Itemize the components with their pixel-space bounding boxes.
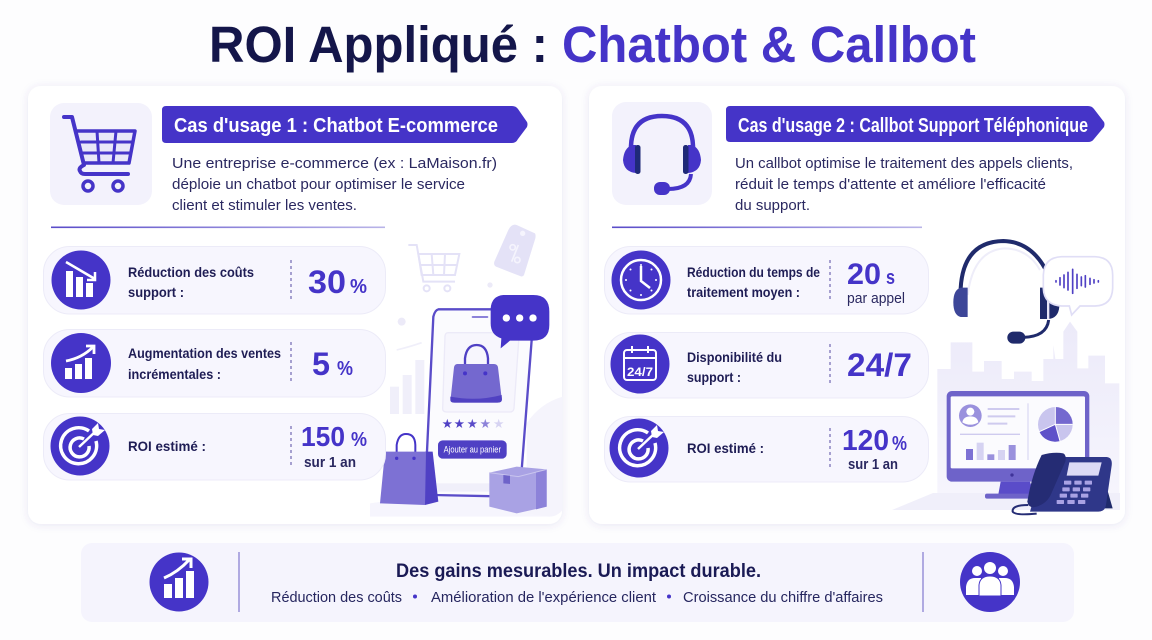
- illustration: e-commerce phone: [370, 225, 563, 517]
- panel: cas d'usage 1: [28, 86, 563, 524]
- stat: ventes incrémentales: incrémentales :: [128, 366, 221, 382]
- stat: réduction des coûts: Réduction des coûts: [128, 264, 254, 280]
- footer benefits: Amélioration de l'expérience client: [431, 590, 656, 606]
- description 1: [172, 155, 497, 214]
- stat: ventes incrémentales: %: [337, 358, 353, 380]
- description 2: réduit le temps d'attente et améliore l'efficacité: [735, 176, 1046, 193]
- description 2: [735, 155, 1073, 214]
- stat: ROI estimé 120: sur 1 an: [848, 456, 898, 473]
- title: [209, 16, 976, 73]
- icon: calendar 24/7: 24/7: [627, 365, 653, 379]
- stat: ROI estimé 150: ROI estimé :: [128, 438, 206, 454]
- footer heading: Des gains mesurables. Un impact durable.: [396, 561, 761, 582]
- icon: people: [960, 552, 1020, 612]
- icon: target: [610, 418, 668, 478]
- stat: temps de traitement: [604, 246, 928, 314]
- panel: footer banner: [81, 543, 1074, 622]
- icon: growth chart: [51, 333, 111, 393]
- stat: ROI estimé 120: %: [892, 433, 907, 455]
- title: Chatbot & Callbot: [562, 16, 976, 73]
- illustration: e-commerce phone: ★: [467, 416, 478, 431]
- stat: réduction des coûts: 30: [308, 264, 346, 300]
- stat: réduction des coûts: support :: [128, 284, 184, 300]
- illustration: e-commerce phone: ★: [493, 416, 504, 431]
- stat: temps de traitement: traitement moyen :: [687, 284, 800, 300]
- illustration: e-commerce phone: Ajouter au panier: [444, 445, 501, 455]
- icon: falling bars: [52, 250, 110, 310]
- stat: ROI estimé 150: %: [351, 429, 367, 451]
- stat: ROI estimé 150: sur 1 an: [304, 454, 356, 471]
- stat: disponibilité: support :: [687, 369, 741, 385]
- stat: temps de traitement: s: [886, 267, 895, 289]
- panel: cas d'usage 2: [589, 86, 1125, 524]
- header ribbon 1: Cas d'usage 1 : Chatbot E-commerce: [174, 115, 498, 137]
- stat: ventes incrémentales: [44, 330, 386, 397]
- stat: réduction des coûts: [44, 246, 386, 314]
- header ribbon 1: [162, 106, 528, 143]
- description 1: Une entreprise e-commerce (ex : LaMaison.fr): [172, 155, 497, 172]
- description 2: Un callbot optimise le traitement des appels clients,: [735, 155, 1073, 172]
- footer benefits: Croissance du chiffre d'affaires: [683, 590, 883, 606]
- stat: temps de traitement: par appel: [847, 290, 905, 307]
- stat: ROI estimé 150: 150: [301, 421, 345, 452]
- footer benefits: Réduction des coûts: [271, 590, 402, 606]
- stat: ventes incrémentales: Augmentation des ventes: [128, 345, 281, 361]
- stat: ROI estimé 150: [44, 414, 386, 480]
- stat: temps de traitement: Réduction du temps de: [687, 264, 820, 280]
- icon: growth: [150, 552, 208, 612]
- title: ROI Appliqué :: [209, 16, 548, 73]
- footer benefits: [271, 590, 883, 606]
- icon: target: [50, 416, 110, 476]
- illustration: e-commerce phone: ★: [442, 416, 453, 431]
- illustration: e-commerce phone: ★: [454, 416, 465, 431]
- description 2: du support.: [735, 197, 810, 214]
- icon: shopping cart: [50, 103, 152, 205]
- stat: ROI estimé 120: ROI estimé :: [687, 440, 764, 456]
- description 1: déploie un chatbot pour optimiser le service: [172, 176, 465, 193]
- icon: clock: [612, 250, 670, 310]
- description 1: client et stimuler les ventes.: [172, 197, 357, 214]
- icon: headset: [612, 102, 712, 205]
- stat: ROI estimé 120: [604, 416, 928, 482]
- illustration: e-commerce phone: ★: [480, 416, 491, 431]
- stat: réduction des coûts: %: [350, 276, 367, 298]
- stat: temps de traitement: 20: [847, 258, 881, 291]
- stat: ROI estimé 120: 120: [842, 425, 889, 457]
- header ribbon 2: [726, 106, 1104, 142]
- stat: ventes incrémentales: 5: [312, 346, 330, 382]
- illustration: callbot support: [892, 241, 1120, 514]
- stat: disponibilité: [604, 332, 928, 398]
- stat: disponibilité: 24/7: [847, 347, 912, 383]
- icon: calendar 24/7: [610, 334, 670, 394]
- stat: disponibilité: Disponibilité du: [687, 349, 782, 365]
